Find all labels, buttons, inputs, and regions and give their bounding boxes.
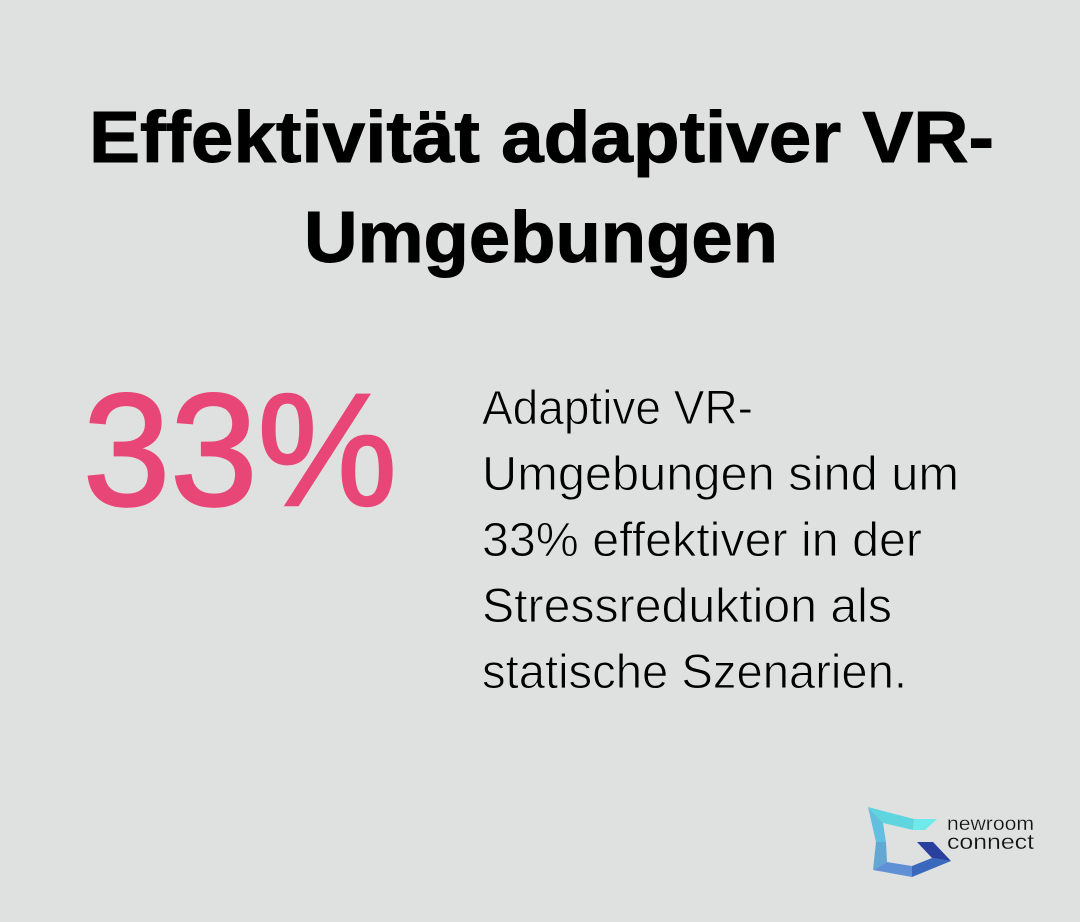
big statistic: 33%: 33% — [83, 360, 397, 539]
description text: Adaptive VR- — [482, 382, 753, 435]
description text: Umgebungen sind um — [482, 448, 959, 501]
logo wordmark — [947, 814, 1034, 854]
logo: newroom connect — [868, 807, 1034, 877]
title: Umgebungen — [304, 198, 778, 278]
title: Effektivität adaptiver VR- — [89, 98, 994, 178]
description text: 33% effektiver in der — [482, 514, 922, 567]
title — [89, 98, 994, 278]
description text: Stressreduktion als — [482, 580, 892, 633]
icon: logo mark — [868, 807, 951, 877]
description text: statische Szenarien. — [482, 646, 907, 699]
description text — [482, 382, 959, 699]
logo wordmark: newroom — [947, 814, 1034, 835]
logo wordmark: connect — [947, 831, 1034, 854]
